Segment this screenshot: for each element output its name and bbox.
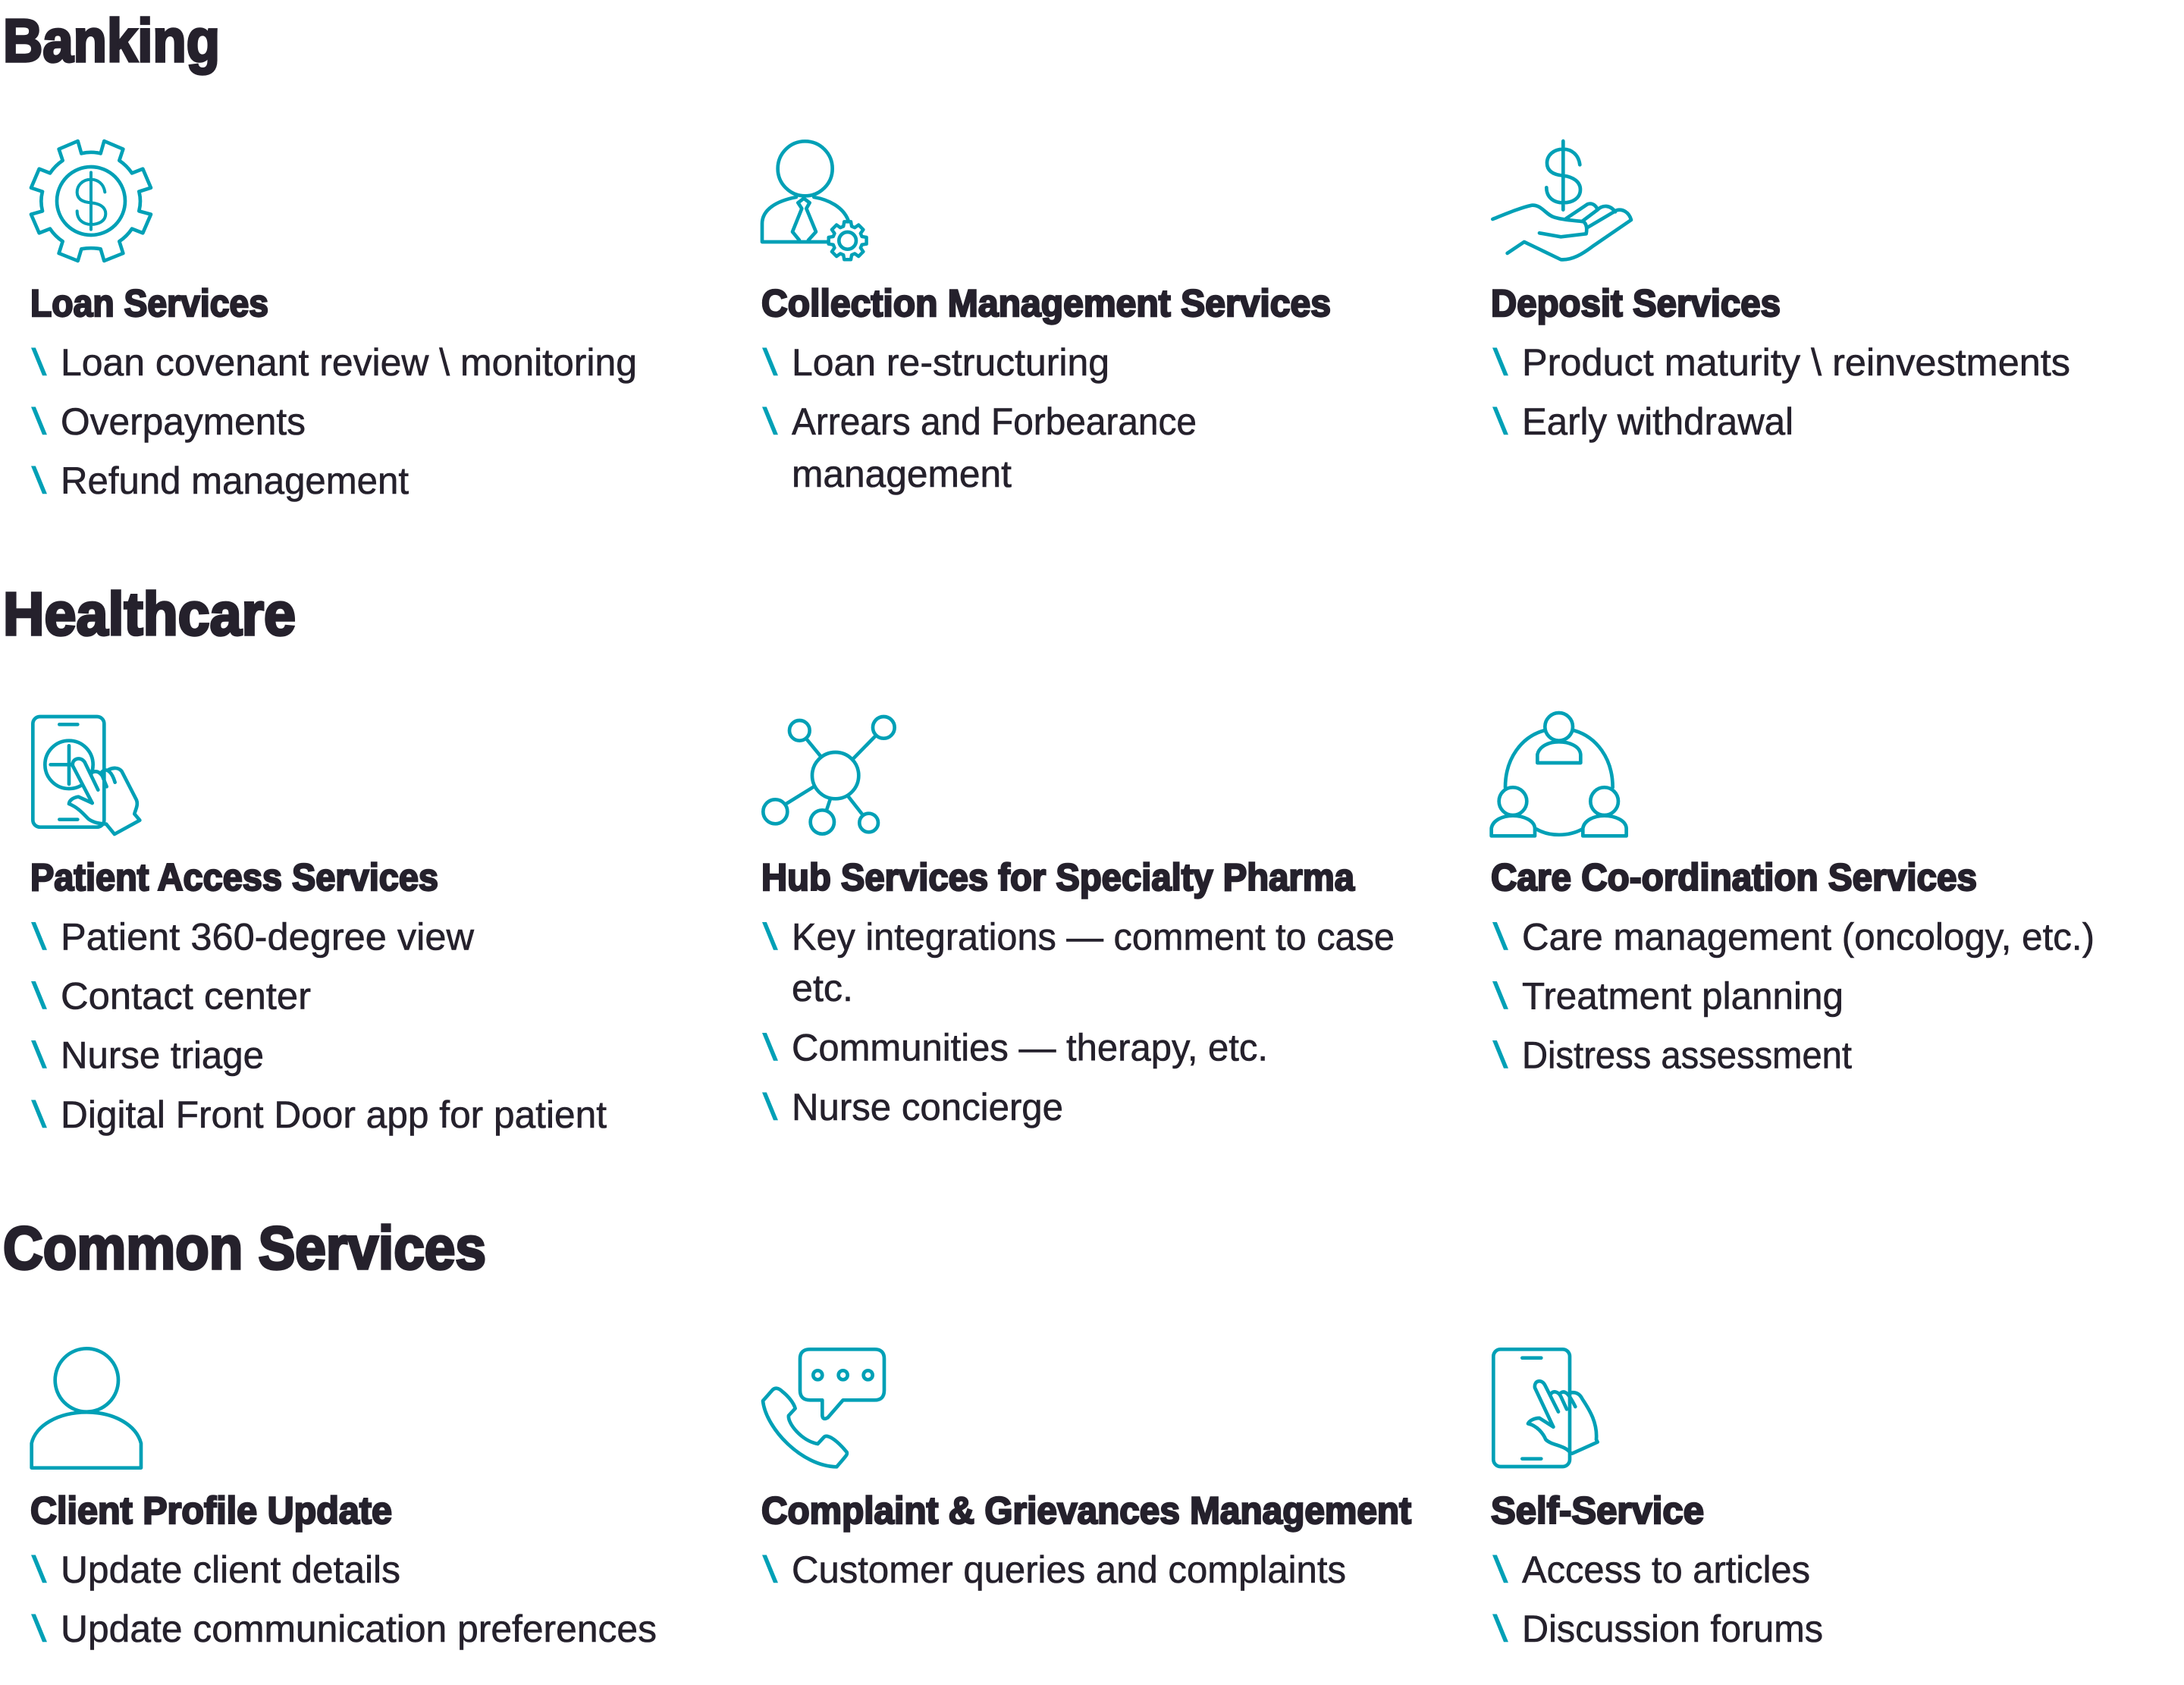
heading: Healthcare: Healthcare [3, 580, 296, 648]
icon: hub and spoke network [763, 717, 895, 834]
list: Deposit Services items: Early withdrawal [1522, 400, 1793, 443]
list: Deposit Services items: \ [1492, 400, 1508, 443]
list: Collection Management items: \ [762, 400, 778, 443]
panel: Care Co-ordination Services [1491, 713, 2095, 1077]
list: Care Co-ordination items: \ [1492, 916, 1508, 959]
panel: Loan Services [30, 141, 637, 502]
list: Collection Management items: management [792, 453, 1012, 495]
list: Patient Access items: Nurse triage [61, 1034, 264, 1077]
list: Hub Services items: Key integrations — comment to case [792, 916, 1395, 959]
list: Client Profile items: Update communication preferences [61, 1608, 657, 1650]
list: Loan Services items: Overpayments [61, 400, 306, 443]
list: Patient Access items [31, 916, 607, 1136]
list: Client Profile items: \ [31, 1549, 47, 1591]
panel: Collection Management Services [761, 141, 1331, 495]
heading: Common Services: Common Services [3, 1214, 486, 1282]
subheading: Collection Management Services: Collection Management Services [761, 282, 1331, 325]
list: Care Co-ordination items: \ [1492, 1034, 1508, 1077]
icon: hand holding dollar sign [1492, 141, 1631, 259]
panel: Complaint & Grievances Management [761, 1349, 1411, 1591]
icon: businessperson with gear [762, 141, 867, 259]
list: Care Co-ordination items [1492, 916, 2095, 1077]
subheading: Deposit Services: Deposit Services [1491, 282, 1781, 325]
icon: gear with dollar sign [31, 141, 151, 261]
list: Self-Service items: Discussion forums [1522, 1608, 1823, 1650]
list: Loan Services items [31, 341, 637, 502]
list: Care Co-ordination items: \ [1492, 975, 1508, 1018]
list: Loan Services items: \ [31, 341, 47, 384]
list: Hub Services items: \ [762, 1086, 778, 1128]
list: Self-Service items: \ [1492, 1608, 1508, 1650]
list: Loan Services items: Loan covenant review \ monitoring [61, 341, 637, 384]
list: Deposit Services items [1492, 341, 2070, 443]
panel: Hub Services for Specialty Pharma [761, 717, 1395, 1128]
list: Self-Service items: Access to articles [1522, 1549, 1810, 1591]
subheading: Hub Services for Specialty Pharma: Hub Services for Specialty Pharma [761, 856, 1355, 899]
icon: phone with medical cross and hand [33, 717, 140, 834]
list: Patient Access items: \ [31, 975, 47, 1018]
icon: three people in a circle [1492, 713, 1627, 836]
list: Patient Access items: \ [31, 1094, 47, 1136]
panel: Deposit Services [1491, 141, 2070, 443]
list: Collection Management items [762, 341, 1197, 495]
list: Care Co-ordination items: Distress assessment [1522, 1034, 1852, 1077]
list: Self-Service items [1492, 1549, 1823, 1650]
heading: Banking: Banking [3, 7, 220, 74]
list: Loan Services items: \ [31, 460, 47, 502]
list: Collection Management items: Arrears and Forbearance [792, 400, 1197, 443]
list: Deposit Services items: Product maturity \ reinvestments [1522, 341, 2070, 384]
panel: Patient Access Services [30, 717, 607, 1136]
list: Client Profile items: \ [31, 1608, 47, 1650]
list: Care Co-ordination items: Treatment planning [1522, 975, 1844, 1018]
icon: telephone with speech bubble [763, 1349, 884, 1467]
list: Hub Services items: Communities — therapy, etc. [792, 1027, 1268, 1069]
subheading: Patient Access Services: Patient Access Services [30, 856, 438, 899]
list: Loan Services items: \ [31, 400, 47, 443]
list: Hub Services items: \ [762, 916, 778, 959]
icon: hand tapping phone [1493, 1349, 1598, 1467]
subheading: Care Co-ordination Services: Care Co-ordination Services [1491, 856, 1977, 899]
list: Patient Access items: Patient 360-degree view [61, 916, 475, 959]
subheading: Client Profile Update: Client Profile Update [30, 1489, 392, 1532]
list: Hub Services items: etc. [792, 967, 853, 1009]
list: Complaint items: \ [762, 1549, 778, 1591]
list: Hub Services items: Nurse concierge [792, 1086, 1063, 1128]
list: Patient Access items: Contact center [61, 975, 311, 1018]
subheading: Loan Services: Loan Services [30, 282, 268, 325]
list: Client Profile items [31, 1549, 657, 1650]
list: Hub Services items: \ [762, 1027, 778, 1069]
list: Hub Services items [762, 916, 1395, 1128]
list: Patient Access items: \ [31, 916, 47, 959]
list: Loan Services items: Refund management [61, 460, 409, 502]
panel: Client Profile Update [30, 1348, 657, 1650]
list: Self-Service items: \ [1492, 1549, 1508, 1591]
list: Care Co-ordination items: Care management (oncology, etc.) [1522, 916, 2095, 959]
subheading: Complaint & Grievances Management: Complaint & Grievances Management [761, 1489, 1411, 1532]
list: Patient Access items: \ [31, 1034, 47, 1077]
list: Complaint items: Customer queries and complaints [792, 1549, 1346, 1591]
icon: person [32, 1348, 141, 1468]
subheading: Self-Service: Self-Service [1491, 1489, 1704, 1532]
list: Collection Management items: \ [762, 341, 778, 384]
panel: Self-Service [1491, 1349, 1823, 1650]
list: Collection Management items: Loan re-structuring [792, 341, 1109, 384]
list: Client Profile items: Update client details [61, 1549, 400, 1591]
list: Patient Access items: Digital Front Door app for patient [61, 1094, 607, 1136]
list: Deposit Services items: \ [1492, 341, 1508, 384]
